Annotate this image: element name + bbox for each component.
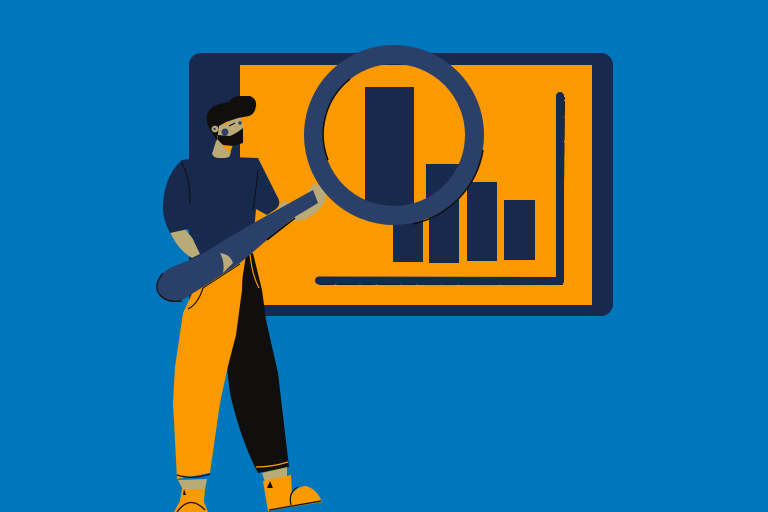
left shoe: [174, 489, 208, 512]
orange trouser leg: [173, 260, 243, 479]
socks: [178, 467, 287, 490]
face: [216, 116, 244, 142]
ear: [212, 126, 218, 132]
wrist: [278, 201, 293, 212]
eyes: [223, 122, 229, 125]
lens ring: [314, 54, 483, 224]
hand holding handle: [290, 184, 326, 221]
neck shadow: [222, 145, 233, 153]
right shoe: [263, 475, 322, 511]
illustration: [156, 45, 613, 512]
magnified bars: [365, 87, 459, 206]
cheek: [222, 128, 228, 136]
beard: [218, 128, 243, 146]
thumb: [220, 253, 233, 273]
handle shadow: [157, 218, 295, 301]
hair: [207, 96, 256, 141]
panel: presentation board: [189, 53, 613, 316]
magnifying glass: [157, 54, 483, 302]
head: [207, 96, 256, 146]
bar chart: [393, 182, 535, 263]
neck: [212, 138, 231, 158]
black trouser leg: [227, 253, 289, 473]
arm skin: [170, 228, 204, 258]
trouser hem lines: [177, 254, 288, 477]
chart axes: [319, 96, 564, 284]
handle: [157, 190, 318, 302]
sweater: [163, 156, 279, 254]
person: [163, 96, 326, 512]
